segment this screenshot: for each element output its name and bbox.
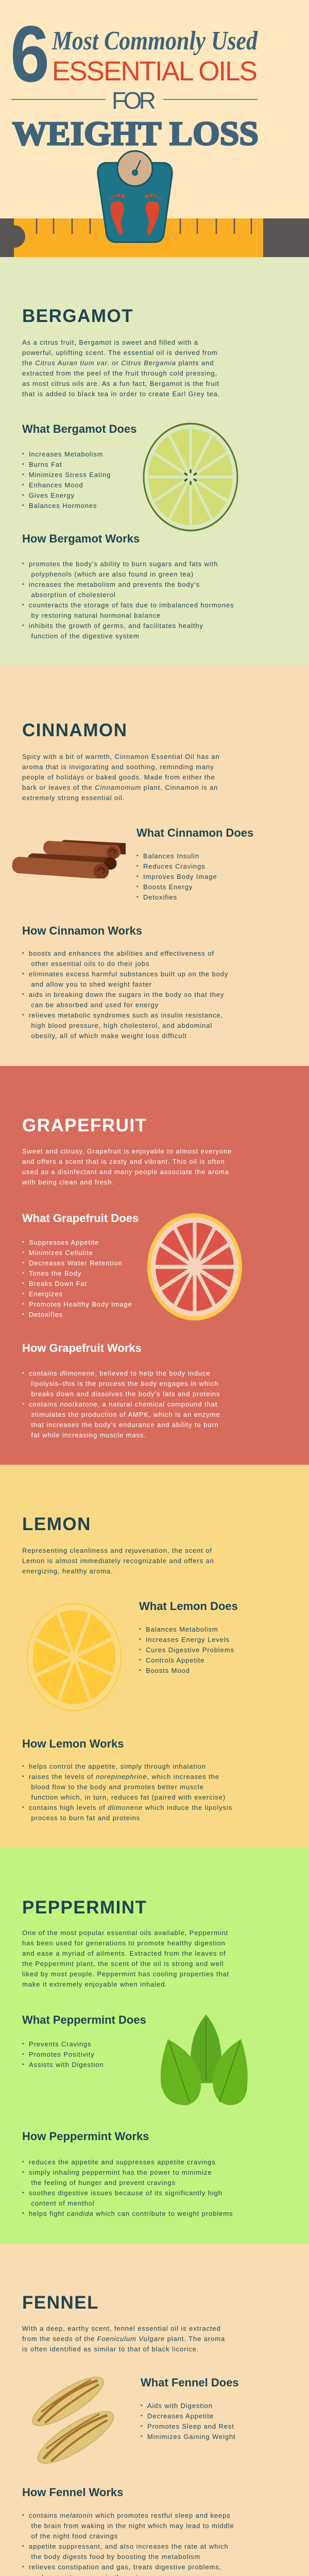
list: how cinnamon works: aids in breaking down the sugars in the body so that they: [29, 991, 224, 998]
list: how cinnamon works: high blood pressure, high cholesterol, and abdominal: [31, 1022, 212, 1029]
list: lemon benefits: [139, 1625, 234, 1674]
title: weight loss: WEIGHT LOSS: [12, 115, 259, 152]
list: grapefruit benefits: Suppresses Appetite: [29, 1239, 99, 1246]
text: peppermint intro: make it extremely enjoyable when inhaled.: [22, 1980, 167, 1988]
text: bergamot intro: as most citrus oils are. As a fun fact, Bergamot is the fruit: [22, 380, 219, 387]
list: how cinnamon works: relieves metabolic syndromes such as insulin resistance,: [29, 1011, 223, 1019]
list: how peppermint works: the feeling of hunger and prevent cravings: [31, 2179, 176, 2187]
list: how lemon works: function which, in turn, reduces fat (paired with exercise): [31, 1793, 226, 1801]
heading: what bergamot does: What Bergamot Does: [22, 422, 136, 435]
heading: how cinnamon works: How Cinnamon Works: [22, 924, 142, 937]
list: how grapefruit works: contains nootkatone, a natural chemical compound that: [29, 1400, 217, 1408]
list: how peppermint works: reduces the appetite and suppresses appetite cravings: [29, 2158, 216, 2166]
list: bergamot benefits: Balances Hormones: [29, 502, 97, 510]
list: cinnamon benefits: Reduces Cravings: [143, 862, 205, 870]
list: how fennel works: relieves constipation and gas, treats digestive problems,: [29, 2563, 221, 2571]
text: grapefruit intro: used as a disinfectant and many people associate the aroma: [22, 1168, 229, 1176]
text: bergamot intro: that is added to black tea in order to create Earl Grey tea.: [22, 390, 220, 398]
list: cinnamon benefits: Detoxifies: [143, 893, 177, 901]
text: bergamot intro: extracted from the peel of the fruit through cold pressing,: [22, 369, 217, 377]
heading: how bergamot works: How Bergamot Works: [22, 532, 140, 545]
heading: how fennel works: How Fennel Works: [22, 2486, 123, 2499]
text: peppermint intro: has been used for generations to promote healthy digestion: [22, 1939, 226, 1947]
icon: grapefruit slice: [147, 1213, 242, 1320]
list: how lemon works: contains high levels of dlimonene which induce the lipolysis: [29, 1804, 232, 1811]
list: how grapefruit works: that increases the body's endurance and ability to burn: [31, 1421, 219, 1429]
text: grapefruit intro: Sweet and citrusy, Grapefruit is enjoyable to almost everyone: [22, 1147, 232, 1155]
heading: what fennel does: What Fennel Does: [141, 2376, 239, 2389]
heading: how peppermint works: How Peppermint Works: [22, 2130, 149, 2143]
text: grapefruit intro: [22, 1147, 232, 1186]
list: peppermint benefits: [22, 2040, 104, 2069]
heading: bergamot: BERGAMOT: [22, 306, 133, 326]
list: lemon benefits: Cures Digestive Problems: [146, 1646, 234, 1654]
list: how fennel works: the brain from waking in the night which may lead to middle: [31, 2522, 234, 2530]
text: bergamot intro: the Citrus Auran tium var. or Citrus Bergamia plants and: [22, 359, 214, 367]
list: how fennel works: the body digests food by boosting the metabolism: [31, 2553, 200, 2561]
list: lemon benefits: Increases Energy Levels: [146, 1636, 230, 1643]
list: how cinnamon works: [22, 950, 228, 1040]
heading: grapefruit: GRAPEFRUIT: [22, 1115, 147, 1136]
text: peppermint intro: One of the most popular essential oils available, Peppermint: [22, 1929, 228, 1937]
text: lemon intro: Lemon is almost immediately recognizable and offers an: [22, 1557, 214, 1565]
panel: cinnamon: [0, 666, 309, 1066]
icon: lime slice: [143, 422, 238, 532]
list: how grapefruit works: breaks down and dissolves the body's fats and proteins: [31, 1390, 220, 1398]
list: lemon benefits: Controls Appetite: [146, 1656, 204, 1664]
list: fennel benefits: [141, 2402, 236, 2441]
list: lemon benefits: Balances Metabolism: [146, 1625, 218, 1633]
list: grapefruit benefits: Decreases Water Retention: [29, 1259, 123, 1267]
list: cinnamon benefits: [136, 852, 217, 901]
list: fennel benefits: Minimizes Gaining Weight: [147, 2433, 236, 2441]
title: essential oils: ESSENTIAL OILS: [52, 56, 258, 87]
text: fennel intro: With a deep, earthy scent, fennel essential oil is extracted: [22, 2325, 221, 2332]
list: how lemon works: blood flow to the body and promotes better muscle: [31, 1783, 204, 1791]
list: how grapefruit works: contains dlimonene, believed to help the body induce: [29, 1369, 211, 1377]
list: how cinnamon works: and allow you to shed weight faster: [31, 980, 152, 988]
list: grapefruit benefits: [22, 1239, 132, 1318]
list: how fennel works: appetite suppressant, and also increases the rate at which: [29, 2543, 229, 2550]
list: how peppermint works: helps fight candida which can contribute to weight problems: [29, 2210, 233, 2217]
list: grapefruit benefits: Breaks Down Fat: [29, 1280, 87, 1287]
list: cinnamon benefits: Balances Insulin: [143, 852, 199, 860]
heading: fennel: FENNEL: [22, 2293, 99, 2313]
list: how cinnamon works: boosts and enhances the abilities and effectiveness of: [29, 950, 214, 957]
text: bergamot intro: As a citrus fruit, Bergamot is sweet and filled with a: [22, 338, 198, 346]
list: how peppermint works: content of menthol: [31, 2199, 95, 2207]
heading: what lemon does: What Lemon Does: [139, 1600, 238, 1613]
tape measure: [0, 218, 309, 257]
title: 6: 6: [10, 9, 49, 98]
list: how bergamot works: increases the metabolism and prevents the body’s: [29, 581, 200, 588]
header: [0, 0, 309, 257]
text: grapefruit intro: and offers a scent that is zesty and vibrant. This oil is often: [22, 1158, 225, 1165]
heading: peppermint: PEPPERMINT: [22, 1897, 147, 1918]
panel: lemon: [0, 1465, 309, 1848]
list: how lemon works: [22, 1762, 232, 1822]
text: fennel intro: [22, 2325, 225, 2353]
list: how bergamot works: promotes the body’s ability to burn sugars and fats with: [29, 560, 218, 568]
text: grapefruit intro: with being clean and fresh.: [22, 1178, 114, 1186]
list: how bergamot works: polyphenols (which are also found in green tea): [31, 570, 194, 578]
list: bergamot benefits: Increases Metabolism: [29, 450, 103, 458]
list: bergamot benefits: Burns Fat: [29, 461, 62, 468]
list: fennel benefits: Aids with Digestion: [147, 2402, 213, 2410]
heading: what grapefruit does: What Grapefruit Does: [22, 1212, 139, 1225]
list: how bergamot works: inhibits the growth of germs, and facilitates healthy: [29, 622, 203, 630]
icon: lemon slice: [27, 1603, 122, 1711]
list: how lemon works: raises the levels of norepinephrine, which increases the: [29, 1773, 219, 1781]
text: fennel intro: from the seeds of the Foeniculum Vulgare plant. The aroma: [22, 2335, 225, 2343]
list: how fennel works: [22, 2512, 234, 2576]
panel: bergamot: [0, 257, 309, 666]
list: cinnamon benefits: Boosts Energy: [143, 883, 193, 891]
list: how bergamot works: counteracts the storage of fats due to imbalanced hormones: [29, 601, 234, 609]
text: lemon intro: [22, 1547, 214, 1575]
list: grapefruit benefits: Minimizes Cellulite: [29, 1249, 93, 1257]
heading: lemon: LEMON: [22, 1514, 91, 1534]
list: fennel benefits: Decreases Appetite: [147, 2412, 214, 2420]
list: grapefruit benefits: Energizes: [29, 1290, 63, 1298]
list: bergamot benefits: Enhances Mood: [29, 481, 83, 489]
panel: grapefruit: [0, 1066, 309, 1465]
list: how cinnamon works: obesity, all of which make weight loss difficult: [31, 1032, 187, 1040]
list: how grapefruit works: lipolysis–this is the process the body engages in which: [31, 1380, 218, 1387]
text: peppermint intro: [22, 1929, 229, 1988]
heading: cinnamon: CINNAMON: [22, 720, 127, 740]
list: how cinnamon works: eliminates excess harmful substances built up on the body: [29, 970, 228, 978]
text: cinnamon intro: bark or leaves of the Cinnamomum plant, Cinnamon is an: [22, 784, 218, 791]
panel: fennel: [0, 2244, 309, 2576]
list: bergamot benefits: Minimizes Stress Eating: [29, 471, 111, 479]
text: cinnamon intro: people of holidays or baked goods. Made from either the: [22, 773, 215, 781]
list: how cinnamon works: can be absorbed and used for energy: [31, 1001, 159, 1009]
list: cinnamon benefits: Improves Body Image: [143, 873, 217, 880]
list: how bergamot works: function of the digestive system: [31, 632, 140, 640]
list: how grapefruit works: fat while increasing muscle mass.: [31, 1431, 146, 1439]
list: bergamot benefits: [22, 450, 111, 510]
list: how fennel works: of the night food cravings: [31, 2532, 118, 2540]
list: peppermint benefits: Promotes Positivity: [29, 2050, 95, 2058]
icon: mint leaves: [161, 2014, 248, 2105]
heading: what cinnamon does: What Cinnamon Does: [136, 826, 253, 839]
list: how grapefruit works: stimulates the production of AMPK, which is an enzyme: [31, 1411, 220, 1418]
list: how lemon works: process to burn fat and proteins: [31, 1814, 140, 1822]
text: peppermint intro: the Peppermint plant, the scent of the oil is strong and well: [22, 1960, 224, 1968]
list: how grapefruit works: [22, 1369, 220, 1439]
list: lemon benefits: Boosts Mood: [146, 1667, 190, 1674]
list: how fennel works: contains melatonin which promotes restful sleep and keeps: [29, 2512, 231, 2519]
panel: peppermint: [0, 1848, 309, 2244]
text: bergamot intro: [22, 338, 220, 398]
title: most commonly used: Most Commonly Used: [52, 26, 258, 56]
list: grapefruit benefits: Detoxifies: [29, 1311, 63, 1318]
list: how peppermint works: soothes digestive issues because of its significantly high: [29, 2189, 222, 2197]
icon: bathroom scale: [98, 151, 172, 242]
list: grapefruit benefits: Tones the Body: [29, 1269, 81, 1277]
text: cinnamon intro: [22, 753, 220, 802]
text: cinnamon intro: Spicy with a bit of warmth, Cinnamon Essential Oil has an: [22, 753, 220, 760]
title: for: FOR: [112, 87, 156, 114]
text: fennel intro: is often identified as similar to that of black licorice.: [22, 2345, 199, 2353]
list: how bergamot works: by restoring natural hormonal balance: [31, 612, 161, 619]
heading: what peppermint does: What Peppermint Does: [22, 2013, 146, 2026]
text: cinnamon intro: extremely strong essential oil.: [22, 794, 125, 802]
list: fennel benefits: Promotes Sleep and Rest: [147, 2422, 234, 2430]
text: lemon intro: Representing cleanliness and rejuvenation, the scent of: [22, 1547, 212, 1554]
heading: how lemon works: How Lemon Works: [22, 1737, 124, 1750]
list: how bergamot works: absorption of cholesterol: [31, 591, 116, 599]
text: peppermint intro: liked by most people. Peppermint has cooling properties that: [22, 1970, 229, 1978]
list: how peppermint works: [22, 2158, 233, 2217]
text: peppermint intro: and ease a myriad of ailments. Extracted from the leaves of: [22, 1950, 226, 1957]
list: peppermint benefits: Prevents Cravings: [29, 2040, 92, 2048]
icon: fennel seeds: [32, 2377, 114, 2464]
list: how bergamot works: [22, 560, 234, 640]
icon: cinnamon sticks: [12, 840, 126, 878]
list: how lemon works: helps control the appetite, simply through inhalation: [29, 1762, 206, 1770]
list: how cinnamon works: other essential oils to do their jobs: [31, 960, 149, 968]
text: cinnamon intro: aroma that is invigorating and soothing, reminding many: [22, 763, 214, 771]
list: bergamot benefits: Gives Energy: [29, 492, 75, 499]
text: bergamot intro: powerful, uplifting scent. The essential oil is derived from: [22, 349, 218, 357]
heading: how grapefruit works: How Grapefruit Works: [22, 1342, 142, 1354]
list: how peppermint works: simply inhaling peppermint has the power to minimize: [29, 2168, 212, 2176]
list: grapefruit benefits: Promotes Healthy Body Image: [29, 1300, 132, 1308]
list: peppermint benefits: Assists with Digestion: [29, 2061, 104, 2069]
text: lemon intro: energizing, healthy aroma.: [22, 1567, 113, 1575]
